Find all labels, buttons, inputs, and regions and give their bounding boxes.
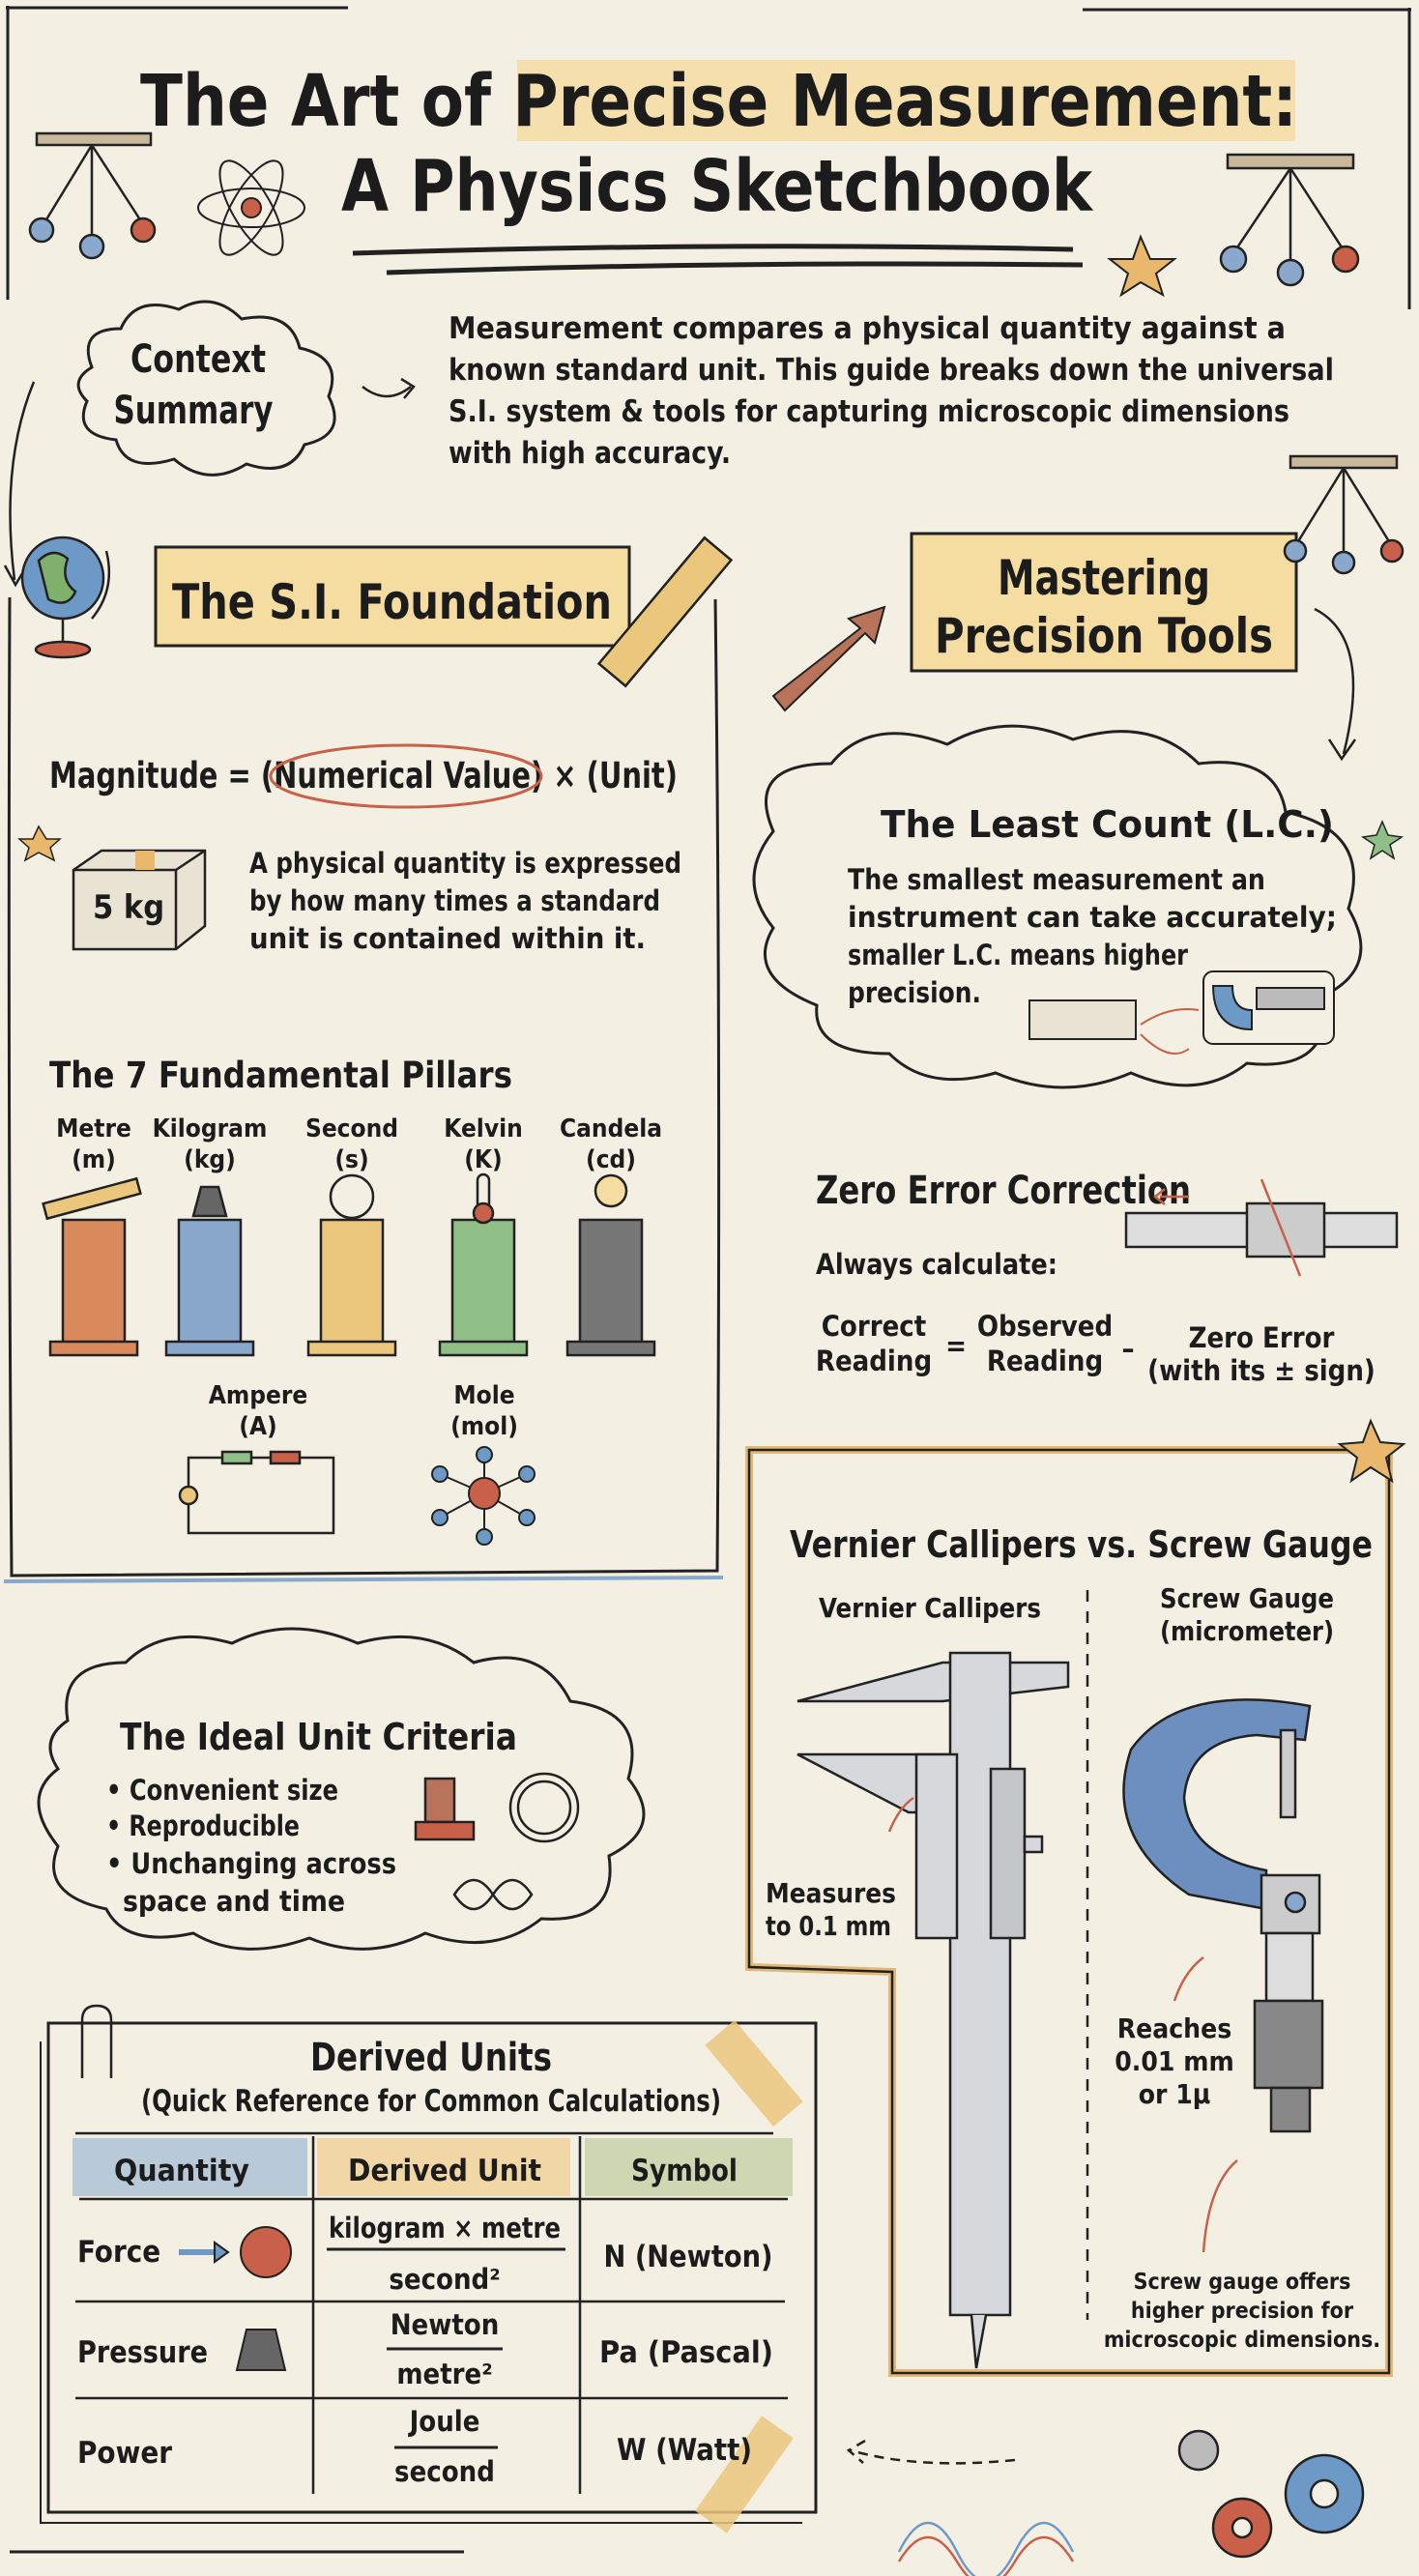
table: derived units: Derived Units — [310, 2036, 552, 2080]
pillars: Second — [305, 1114, 398, 1143]
callout: least count cloud: The Least Count (L.C.) — [881, 803, 1334, 846]
panel: vernier vs screw gauge: microscopic dimensions. — [1104, 2328, 1380, 2353]
pendulum right 2 — [1285, 456, 1403, 573]
pillars: ampere & mole — [209, 1381, 518, 1441]
section: zero error: Observed — [977, 1310, 1113, 1343]
text block: summary: Measurement compares a physical quantity against a — [449, 311, 1286, 346]
title: A Physics Sketchbook — [341, 145, 1094, 228]
section: zero error: Zero Error Correction — [816, 1169, 1191, 1213]
table: derived units: W (Watt) — [617, 2433, 752, 2468]
callout: ideal unit cloud: • Convenient size — [106, 1774, 338, 1807]
panel: vernier vs screw gauge: to 0.1 mm — [766, 1910, 891, 1942]
callout: context summary cloud: Summary — [114, 389, 273, 433]
text block: summary: with high accuracy. — [449, 436, 731, 471]
section: zero error: (with its ± sign) — [1147, 1354, 1376, 1387]
callout: least count cloud: smaller L.C. means higher — [848, 939, 1188, 971]
icon: molecule — [432, 1447, 535, 1545]
pillars: ampere & mole: Ampere — [209, 1381, 307, 1410]
icon: scale & micrometer — [1029, 971, 1334, 1054]
table: derived units: Derived Unit — [348, 2154, 541, 2188]
panel: vernier vs screw gauge: or 1μ — [1139, 2078, 1210, 2110]
table: derived units: Pa (Pascal) — [599, 2335, 773, 2370]
table: derived units: Quantity — [114, 2154, 249, 2188]
panel: vernier vs screw gauge — [749, 1421, 1404, 2373]
callout: ideal unit cloud — [39, 1629, 644, 1949]
text block: summary: S.I. system & tools for capturing microscopic dimensions — [449, 394, 1289, 429]
callout: least count cloud: instrument can take accurately; — [848, 901, 1337, 934]
pillars: Candela — [560, 1114, 662, 1143]
icon: pendulum left — [30, 133, 155, 258]
section: zero error: Zero Error — [1189, 1321, 1335, 1354]
panel: vernier vs screw gauge: Reaches — [1117, 2012, 1231, 2044]
pillars: (cd) — [586, 1145, 636, 1174]
pillars: (s) — [334, 1145, 369, 1174]
icon: star title — [1110, 237, 1174, 295]
section: zero error: Always calculate: — [816, 1248, 1057, 1281]
table: derived units: Symbol — [631, 2154, 738, 2188]
panel: vernier vs screw gauge: Vernier Callipers vs. Screw Gauge — [790, 1523, 1373, 1566]
panel: vernier vs screw gauge: higher precision for — [1131, 2299, 1354, 2324]
table: derived units: Pressure — [77, 2335, 208, 2370]
callout: ideal unit cloud: • Unchanging across — [106, 1847, 396, 1880]
section: zero error: – — [1121, 1332, 1135, 1365]
pillars — [56, 1114, 662, 1174]
table: derived units — [41, 2006, 816, 2533]
icon: paperclip — [82, 2006, 111, 2078]
table: derived units: second² — [389, 2263, 501, 2296]
table: derived units: (Quick Reference for Common Calculations) — [141, 2084, 721, 2119]
icon: globe — [22, 537, 109, 657]
table: derived units: N (Newton) — [603, 2240, 773, 2274]
tape pieces — [705, 2020, 803, 2127]
callout: least count cloud: precision. — [848, 976, 981, 1009]
table: derived units: second — [394, 2455, 495, 2488]
table: derived units: Power — [77, 2436, 172, 2471]
section: zero error: = — [945, 1329, 967, 1362]
panel: vernier vs screw gauge: Screw gauge offers — [1134, 2270, 1350, 2295]
panel: vernier vs screw gauge: (micrometer) — [1160, 1615, 1334, 1647]
icon: screw gauge — [1123, 1699, 1322, 2131]
text: quantity definition: A physical quantity is expressed — [249, 847, 681, 880]
pillars: (kg) — [184, 1145, 236, 1174]
section: zero error: Reading — [987, 1345, 1103, 1377]
pillars: Metre — [56, 1114, 131, 1143]
heading: 7 pillars: The 7 Fundamental Pillars — [49, 1055, 512, 1096]
callout: least count cloud — [754, 726, 1361, 1087]
arrow: context to text — [362, 379, 414, 398]
callout: ideal unit cloud: The Ideal Unit Criteria — [120, 1716, 517, 1758]
heading: SI foundation — [156, 547, 629, 646]
callout: context summary cloud — [78, 302, 334, 475]
section: zero error — [816, 1169, 1397, 1387]
heading: mastering precision tools: Precision Tools — [935, 608, 1273, 664]
icon: gears and wave — [899, 2431, 1363, 2576]
text: quantity definition: by how many times a standard — [249, 884, 660, 917]
icon: atom — [198, 152, 304, 264]
text block: summary — [449, 311, 1334, 471]
pillars: Kelvin — [444, 1114, 523, 1143]
title: The Art of Precise Measurement: — [140, 60, 1297, 143]
callout: context summary cloud: Context — [130, 337, 266, 382]
heading: SI foundation: The S.I. Foundation — [172, 574, 612, 630]
table: derived units: Newton — [391, 2308, 499, 2341]
formula: magnitude: Magnitude = (Numerical Value) × (Unit) — [49, 755, 678, 796]
table: derived units: metre² — [396, 2358, 493, 2390]
text: quantity definition — [249, 847, 681, 955]
heading: mastering precision tools: Mastering — [998, 550, 1210, 606]
panel: vernier vs screw gauge: Measures — [766, 1877, 896, 1909]
pillars: ampere & mole: (mol) — [450, 1412, 518, 1441]
stars right — [1363, 822, 1402, 858]
section: zero error: Reading — [816, 1345, 932, 1377]
arrow: context down — [5, 382, 34, 585]
icon: vernier caliper — [797, 1653, 1068, 2368]
arrow: tools down — [1315, 609, 1355, 759]
panel: vernier vs screw gauge: Vernier Callipers — [819, 1592, 1041, 1624]
text block: summary: known standard unit. This guide breaks down the universal — [449, 353, 1334, 388]
icon: ruler — [599, 537, 731, 686]
panel: vernier vs screw gauge: 0.01 mm — [1115, 2045, 1234, 2077]
icon: circuit — [180, 1452, 333, 1533]
callout: ideal unit cloud: • Reproducible — [106, 1809, 300, 1842]
table: derived units: kilogram × metre — [329, 2212, 561, 2244]
icon: 5kg box: 5 kg — [93, 888, 164, 927]
text: quantity definition: unit is contained within it. — [249, 922, 646, 955]
panel: vernier vs screw gauge: Screw Gauge — [1160, 1582, 1334, 1614]
pillars: ampere & mole: Mole — [453, 1381, 515, 1410]
pillars: (m) — [72, 1145, 116, 1174]
arrow: to precision tools — [773, 607, 884, 710]
pillars: Kilogram — [153, 1114, 267, 1143]
callout: ideal unit cloud: space and time — [123, 1885, 345, 1918]
pillars: (K) — [464, 1145, 503, 1174]
panel: SI foundation — [4, 537, 731, 1581]
icon: 5kg box — [19, 826, 205, 949]
icon: caliper zero — [1126, 1179, 1397, 1276]
formula: magnitude — [49, 745, 678, 807]
title — [140, 60, 1297, 273]
callout: least count cloud: The smallest measurement an — [848, 863, 1265, 896]
section: zero error: Correct — [822, 1310, 926, 1343]
heading: mastering precision tools — [912, 534, 1296, 671]
table: derived units: Joule — [408, 2405, 479, 2438]
table: derived units: Force — [77, 2235, 160, 2270]
icon: pendulum right — [1221, 155, 1358, 285]
pillars: ampere & mole: (A) — [239, 1412, 277, 1441]
arrow: gears to table — [849, 2441, 1015, 2463]
